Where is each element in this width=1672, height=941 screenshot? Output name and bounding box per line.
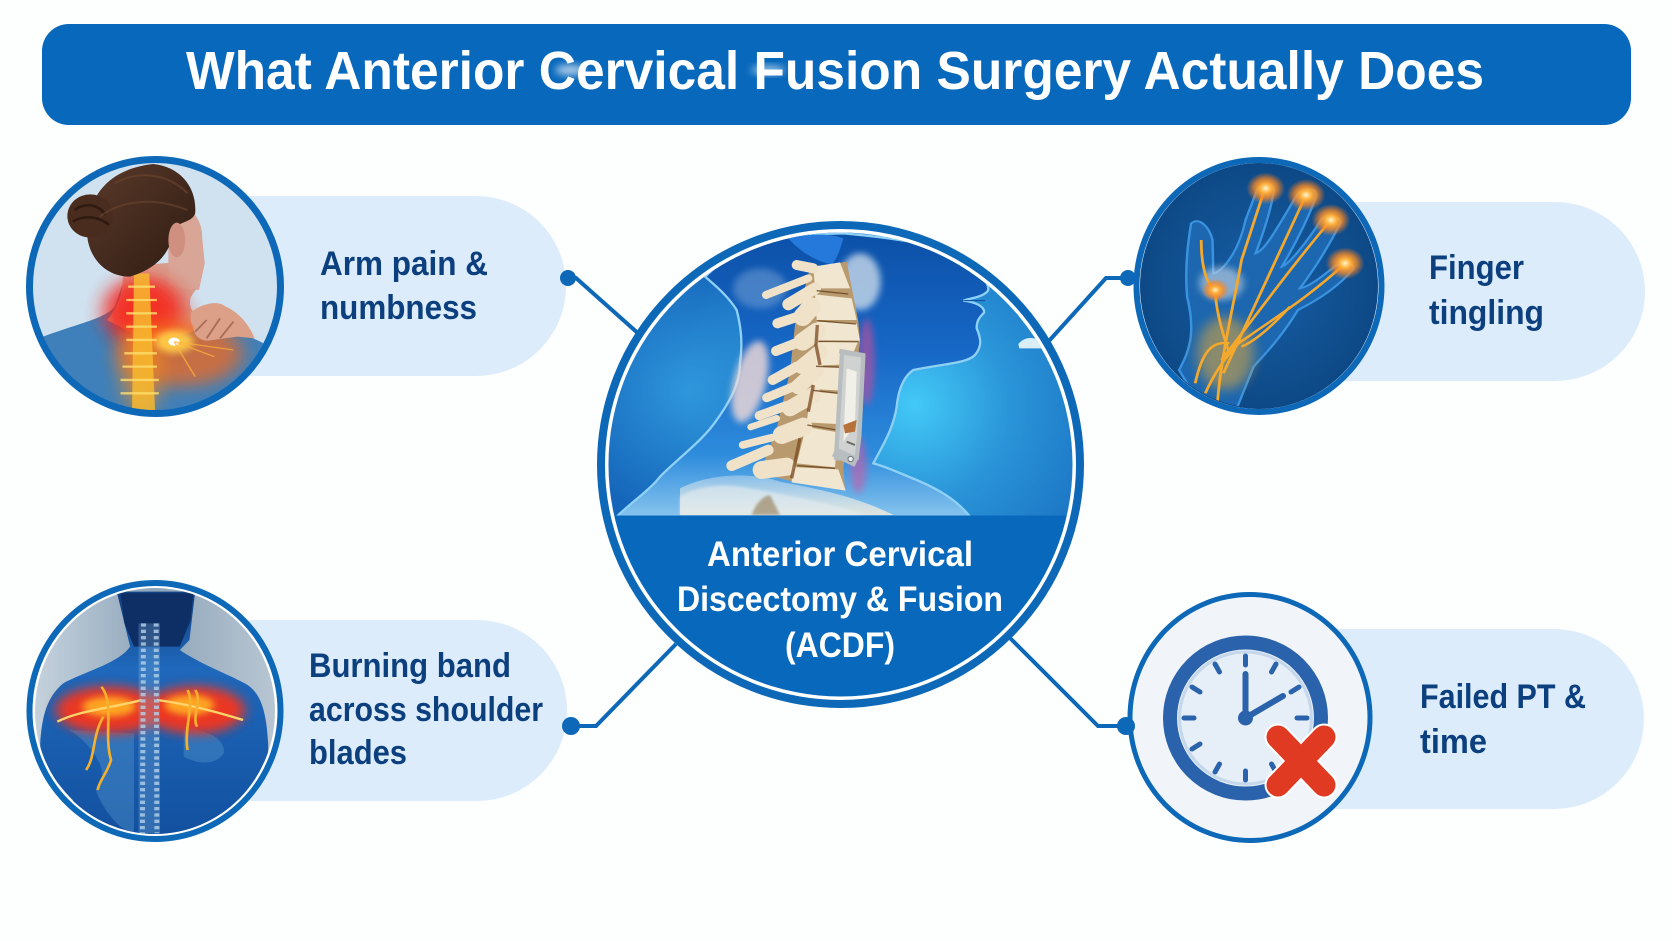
label: failed PT and time: Failed PT &: [1420, 678, 1586, 716]
label: ACDF: Discectomy & Fusion: [677, 580, 1003, 619]
label: failed PT and time: time: [1420, 723, 1487, 761]
connector: bottom right: [1010, 638, 1135, 735]
label pill: [1260, 202, 1645, 381]
connector: bottom left: [562, 644, 676, 735]
panel: central ACDF circle: [590, 210, 1090, 716]
icon: clock with red cross: [1130, 594, 1370, 840]
illustration: cervical spine with fusion plate: [608, 232, 1072, 696]
panel: arm pain and numbness: [30, 160, 566, 423]
panel: finger tingling: [1136, 160, 1645, 412]
title banner: [42, 24, 1631, 125]
title: What Anterior Cervical Fusion Surgery Actually Does: [186, 41, 1484, 101]
label pill: [1250, 629, 1644, 809]
label: finger tingling: Finger: [1429, 249, 1524, 287]
label: ACDF: Anterior Cervical: [707, 535, 973, 574]
label: burning band across shoulder blades: blades: [309, 734, 407, 772]
label pill: [150, 196, 566, 376]
label: burning band across shoulder blades: across shoulder: [309, 691, 543, 729]
label: arm pain and numbness: Arm pain &: [320, 245, 488, 283]
connector: top right: [1048, 270, 1136, 342]
icon: back with burning shoulders: [30, 583, 280, 843]
label: burning band across shoulder blades: Burning band: [309, 647, 511, 685]
label: arm pain and numbness: numbness: [320, 289, 477, 327]
icon: woman with neck pain: [30, 160, 283, 423]
icon: hand with glowing nerves: [1136, 160, 1382, 412]
panel: burning band across shoulder blades: [30, 583, 567, 843]
connector: top left: [560, 270, 640, 335]
label: ACDF: (ACDF): [785, 626, 895, 665]
label pill: [150, 620, 567, 801]
panel: failed PT and time: [1130, 594, 1644, 840]
label: finger tingling: tingling: [1429, 294, 1544, 332]
